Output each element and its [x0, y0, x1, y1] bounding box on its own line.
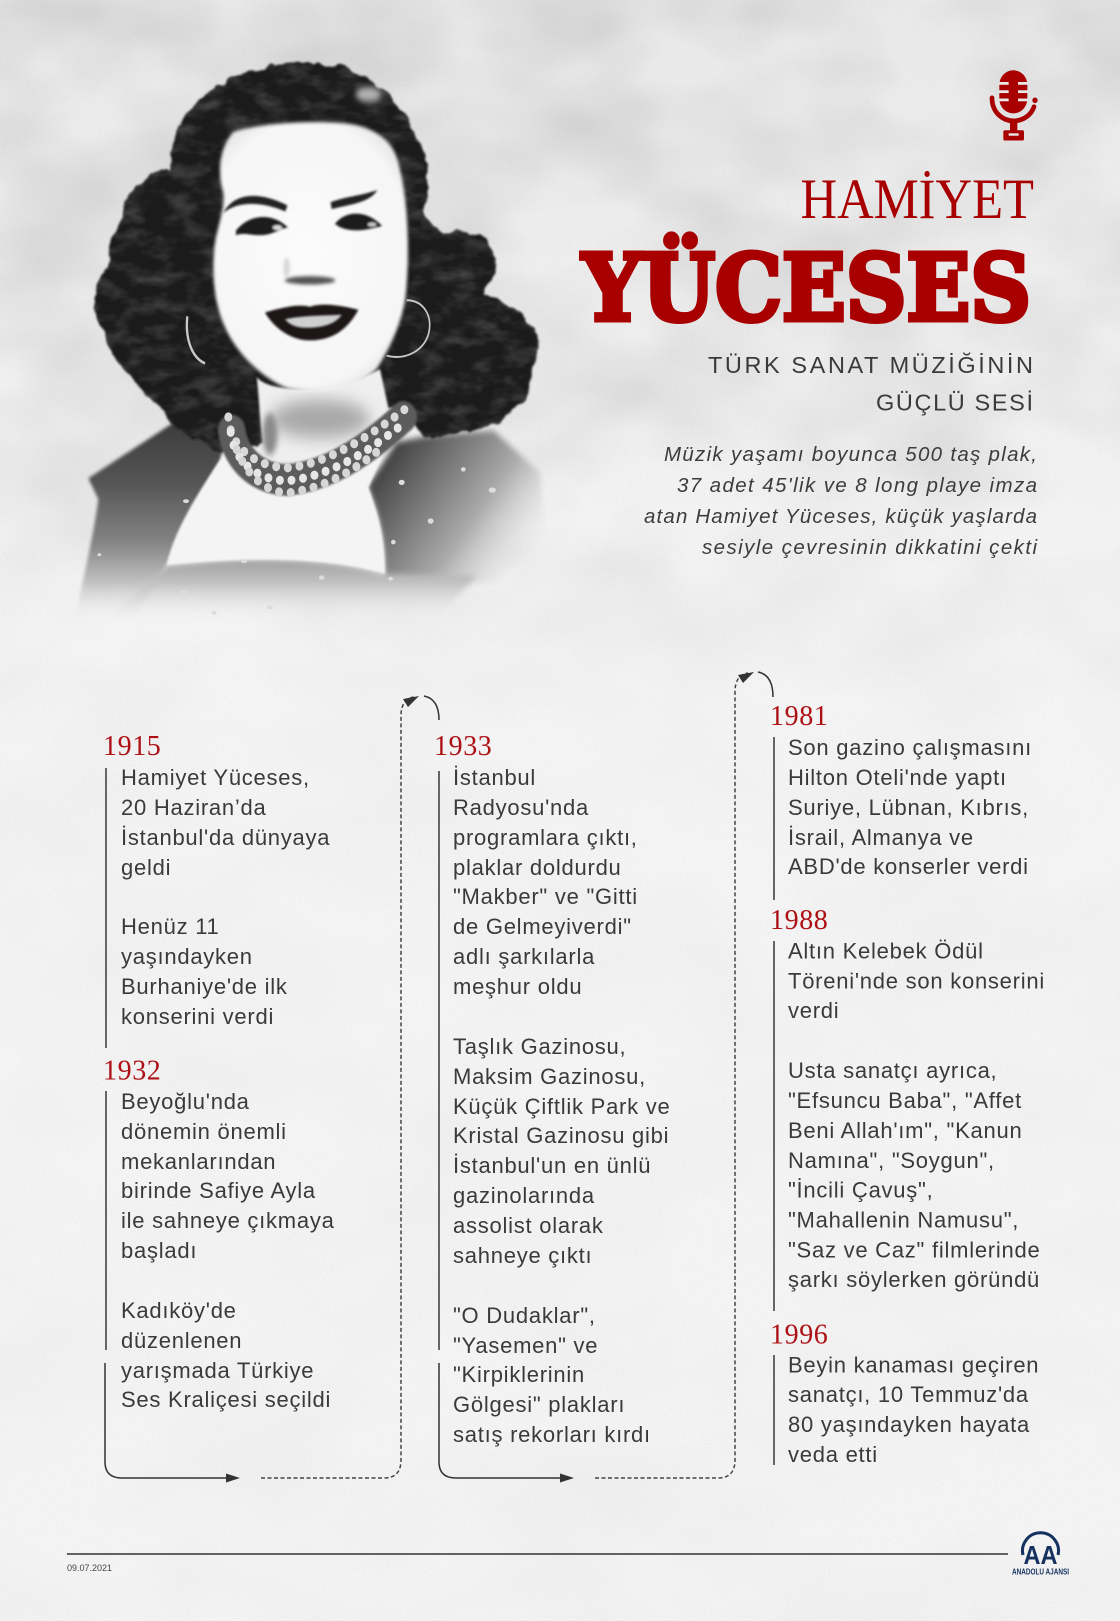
logo: Anadolu Ajansı: ANADOLU AJANSI	[1012, 1566, 1069, 1576]
entry 1933: plaklar doldurdu	[453, 855, 622, 880]
column 3 timeline rules	[773, 737, 775, 1465]
entry 1915: geldi	[121, 855, 171, 880]
entry 1981: ABD'de konserler verdi	[788, 854, 1029, 879]
entry 1933: satış rekorları kırdı	[453, 1422, 651, 1447]
entry 1932: ile sahneye çıkmaya	[121, 1208, 335, 1233]
entry 1933: Maksim Gazinosu,	[453, 1064, 646, 1089]
icon: microphone	[992, 70, 1038, 141]
entry 1988: "Saz ve Caz" filmlerinde	[788, 1238, 1040, 1262]
entry 1988	[770, 905, 1045, 1292]
intro text: 37 adet 45'lik ve 8 long playe imza	[677, 474, 1037, 497]
intro text: atan Hamiyet Yüceses, küçük yaşlarda	[644, 505, 1037, 528]
entry 1915: yaşındayken	[121, 944, 253, 969]
eyebrows	[223, 190, 377, 213]
entry 1933: adlı şarkılarla	[453, 944, 595, 969]
entry 1915: İstanbul'da dünyaya	[121, 825, 330, 850]
entry 1915: Burhaniye'de ilk	[121, 974, 288, 999]
entry 1981: 1981	[770, 701, 828, 732]
entry 1933: "Kirpiklerinin	[453, 1362, 585, 1387]
entry 1988: şarkı söylerken göründü	[788, 1267, 1040, 1292]
entry 1915: Hamiyet Yüceses,	[121, 765, 310, 790]
intro text: sesiyle çevresinin dikkatini çekti	[702, 536, 1038, 559]
entry 1988: "İncili Çavuş",	[788, 1178, 933, 1202]
entry 1981: Suriye, Lübnan, Kıbrıs,	[788, 795, 1029, 820]
entry 1932: Ses Kraliçesi seçildi	[121, 1387, 331, 1412]
entry 1915	[103, 731, 330, 1029]
entry 1981: Hilton Oteli'nde yaptı	[788, 765, 1007, 790]
lips	[265, 305, 358, 340]
face	[213, 122, 408, 391]
entry 1933: Gölgesi" plakları	[453, 1392, 625, 1417]
entry 1988: verdi	[788, 998, 839, 1023]
entry 1932: 1932	[103, 1056, 161, 1086]
neck and chest	[167, 369, 388, 574]
entry 1988: Altın Kelebek Ödül	[788, 938, 984, 964]
entry 1988: Beni Allah'ım", "Kanun	[788, 1118, 1022, 1143]
intro text: Müzik yaşamı boyunca 500 taş plak,	[664, 443, 1037, 466]
logo: Anadolu Ajansı	[1012, 1533, 1069, 1576]
footer rule	[67, 1553, 1008, 1555]
subtitle	[708, 352, 1033, 416]
entry 1996: Beyin kanaması geçiren	[788, 1352, 1039, 1378]
entry 1933: "Yasemen" ve	[453, 1333, 598, 1358]
entry 1933: "O Dudaklar",	[453, 1303, 596, 1328]
entry 1996: 80 yaşındayken hayata	[788, 1412, 1030, 1437]
entry 1933: de Gelmeyiverdi"	[453, 914, 632, 939]
entry 1933: İstanbul'un en ünlü	[453, 1153, 651, 1178]
entry 1932: birinde Safiye Ayla	[121, 1178, 316, 1203]
entry 1988: Töreni'nde son konserini	[788, 968, 1045, 994]
entry 1981: İsrail, Almanya ve	[788, 825, 974, 850]
subtitle: GÜÇLÜ SESİ	[876, 390, 1033, 416]
entry 1981: Son gazino çalışmasını	[788, 735, 1032, 760]
nose	[283, 258, 335, 285]
entry 1933: sahneye çıktı	[453, 1243, 592, 1268]
entry 1915: 20 Haziran’da	[121, 795, 267, 820]
title: HAMİYET: HAMİYET	[800, 168, 1034, 231]
entry 1933: gazinolarında	[453, 1183, 595, 1208]
subtitle: TÜRK SANAT MÜZİĞİNİN	[708, 352, 1033, 378]
eyes	[236, 214, 382, 235]
entry 1933: Küçük Çiftlik Park ve	[453, 1094, 670, 1119]
date: 09.07.2021	[67, 1563, 112, 1573]
entry 1915: Henüz 11	[121, 914, 220, 939]
entry 1933: programlara çıktı,	[453, 825, 638, 850]
entry 1932: mekanlarından	[121, 1149, 276, 1174]
entry 1988: 1988	[770, 905, 828, 936]
entry 1988: "Mahallenin Namusu",	[788, 1208, 1019, 1232]
jacket	[73, 423, 547, 629]
entry 1932: yarışmada Türkiye	[121, 1358, 314, 1383]
column 2 timeline rules and connector	[439, 672, 773, 1482]
entry 1933: Kristal Gazinosu gibi	[453, 1123, 669, 1148]
entry 1996: 1996	[770, 1320, 828, 1350]
entry 1933: Radyosu'nda	[453, 795, 589, 820]
entry 1981	[770, 701, 1032, 879]
entry 1932: başladı	[121, 1238, 197, 1263]
entry 1932: dönemin önemli	[121, 1119, 287, 1144]
entry 1988: Namına", "Soygun",	[788, 1148, 995, 1173]
entry 1932: Beyoğlu'nda	[121, 1089, 250, 1114]
entry 1933: Taşlık Gazinosu,	[453, 1034, 626, 1059]
entry 1932	[103, 1056, 335, 1412]
entry 1932: düzenlenen	[121, 1328, 242, 1353]
dress beads	[97, 467, 496, 615]
earrings	[187, 300, 430, 363]
intro text	[644, 443, 1038, 559]
entry 1988: Usta sanatçı ayrıca,	[788, 1058, 997, 1083]
entry 1915: 1915	[103, 731, 161, 762]
entry 1988: "Efsuncu Baba", "Affet	[788, 1088, 1022, 1113]
hair	[94, 62, 538, 451]
entry 1996: veda etti	[788, 1442, 878, 1467]
entry 1932: Kadıköy'de	[121, 1298, 237, 1323]
portrait photo of Hamiyet Yüceses	[73, 62, 547, 629]
entry 1915: konserini verdi	[121, 1004, 274, 1029]
entry 1996	[770, 1320, 1039, 1467]
entry 1996: sanatçı, 10 Temmuz'da	[788, 1382, 1029, 1407]
entry 1933: meşhur oldu	[453, 974, 582, 999]
pearl necklace	[228, 407, 408, 493]
logo: Anadolu Ajansı: AA	[1024, 1540, 1058, 1570]
title: YÜCESES: YÜCESES	[581, 233, 1031, 342]
entry 1933: 1933	[434, 731, 492, 762]
entry 1933	[434, 731, 670, 1447]
entry 1933: "Makber" ve "Gitti	[453, 884, 638, 909]
entry 1933: İstanbul	[453, 765, 536, 790]
entry 1933: assolist olarak	[453, 1213, 604, 1238]
column 1 timeline rules and connector	[105, 696, 439, 1482]
